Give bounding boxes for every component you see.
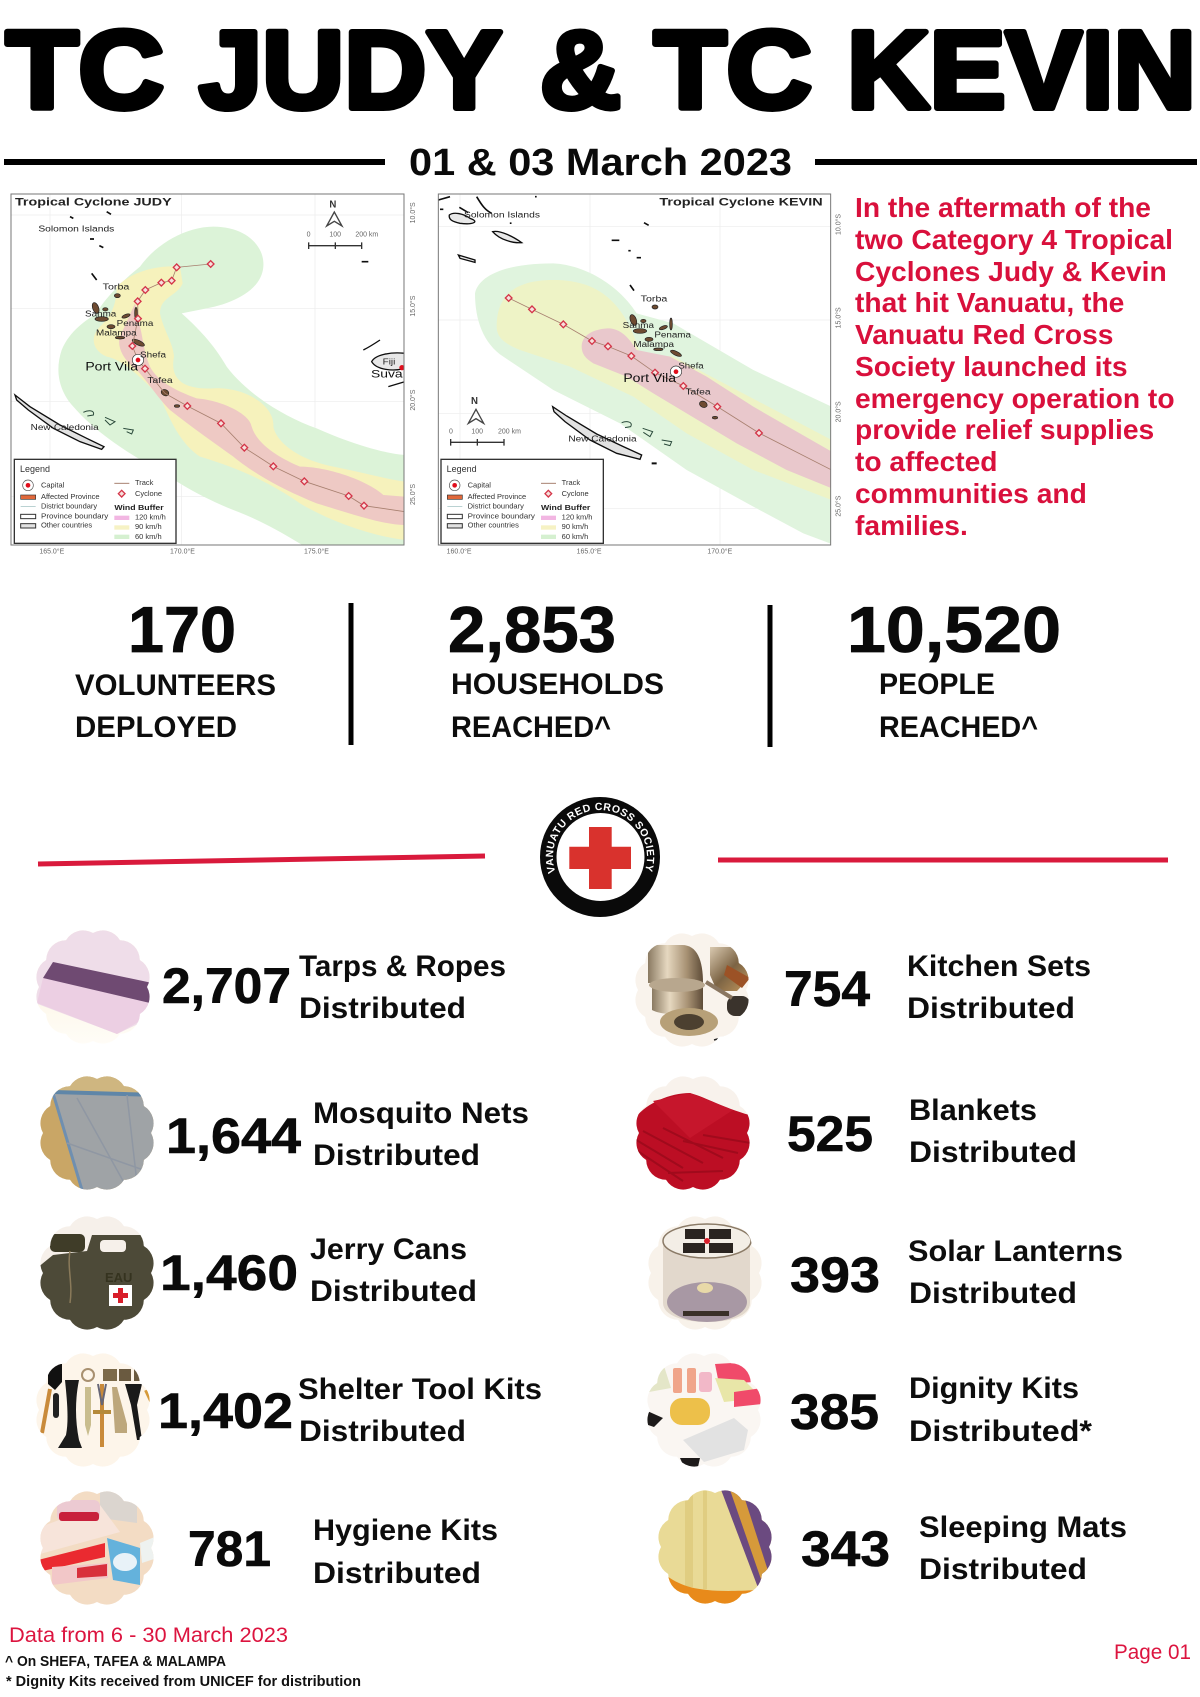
north arrow and scale bar: 100: [329, 232, 341, 239]
map: Tropical Cyclone Judy: 10.0°S: [409, 202, 417, 223]
item: kitchen sets: 754: [784, 961, 870, 1017]
data period note: Data from 6 - 30 March 2023: [9, 1624, 288, 1647]
stat: households: HOUSEHOLDS: [451, 668, 664, 701]
page number: Page 01: [1114, 1641, 1191, 1664]
item: sleeping mats: Sleeping Mats: [919, 1511, 1127, 1544]
legend: Track: [562, 478, 580, 487]
map: Tropical Cyclone Judy: 165.0°E: [39, 547, 65, 555]
track: [509, 298, 832, 470]
90 km/h wind buffer: [94, 266, 405, 540]
item: solar lanterns: Distributed: [909, 1277, 1077, 1310]
logo: Vanuatu Red Cross Society: VANUATU RED CROSS SOCIETY: [546, 802, 654, 874]
map: Tropical Cyclone Kevin: 10.0°S: [835, 214, 843, 235]
north arrow and scale bar: N: [329, 199, 336, 210]
legend: Capital: [41, 480, 65, 489]
map: Tropical Cyclone Kevin: Malampa: [633, 340, 675, 349]
map: Tropical Cyclone Kevin: 165.0°E: [577, 547, 602, 555]
60 km/h wind buffer: [58, 227, 405, 547]
photo: mosquito net: [37, 1073, 157, 1193]
intro paragraph: communities and: [855, 477, 1087, 509]
item: dignity kits: Dignity Kits: [909, 1372, 1079, 1405]
map: Tropical Cyclone Kevin: [438, 194, 843, 555]
map: Tropical Cyclone Judy: Fiji: [383, 358, 396, 367]
item: hygiene kits: Distributed: [313, 1557, 481, 1590]
map: Tropical Cyclone Judy: Tropical Cyclone JUDY: [15, 196, 172, 208]
map: Tropical Cyclone Kevin: Tropical Cyclone KEVIN: [659, 196, 823, 208]
legend: Capital: [468, 480, 491, 489]
item: kitchen sets: [632, 930, 1091, 1050]
item: jerry cans: Distributed: [310, 1275, 477, 1308]
legend: 60 km/h: [562, 532, 588, 541]
stat: volunteers: DEPLOYED: [75, 711, 237, 744]
stat: volunteers: VOLUNTEERS: [75, 669, 276, 702]
map: Tropical Cyclone Judy: Torba: [103, 283, 130, 292]
item: hygiene kits: [37, 1488, 498, 1608]
intro paragraph: In the aftermath of the: [855, 191, 1151, 223]
stat: volunteers: [75, 593, 276, 744]
photo: solar lantern: [648, 1216, 762, 1330]
item: sleeping mats: Distributed: [919, 1553, 1087, 1586]
item: sleeping mats: 343: [801, 1521, 890, 1577]
item: dignity kits: 385: [790, 1384, 879, 1440]
title: JUDY: [199, 9, 502, 132]
stat: volunteers: 170: [128, 593, 236, 666]
map: Tropical Cyclone Kevin: Port Vila: [623, 371, 676, 385]
item: blankets: 525: [787, 1106, 873, 1162]
stat: people: 10,520: [847, 593, 1061, 666]
legend: Cyclone: [562, 489, 589, 498]
map: Tropical Cyclone Judy: 175.0°E: [304, 547, 329, 555]
stat: people: PEOPLE: [879, 668, 995, 701]
map: Tropical Cyclone Judy: Malampa: [96, 329, 137, 338]
north arrow and scale bar: [449, 396, 521, 446]
stat: households: 2,853: [448, 593, 616, 666]
photo: jerry can: EAU: [105, 1270, 132, 1285]
map: Tropical Cyclone Kevin: Solomon Islands: [464, 211, 540, 220]
north arrow and scale bar: 200 km: [355, 232, 378, 239]
stat: people: [847, 593, 1061, 744]
legend: Province boundary: [468, 511, 535, 520]
item: kitchen sets: Kitchen Sets: [907, 950, 1091, 983]
120 km/h wind buffer: [119, 303, 405, 525]
islands: [15, 212, 405, 449]
legend: 90 km/h: [562, 522, 588, 531]
item: mosquito nets: 1,644: [166, 1108, 301, 1164]
photo: red blanket: [636, 1076, 750, 1190]
intro paragraph: [855, 191, 1175, 541]
120 km/h wind buffer: [582, 328, 832, 488]
intro paragraph: emergency operation to: [855, 382, 1175, 414]
title: [6, 9, 1196, 132]
map: Tropical Cyclone Judy: 20.0°S: [409, 389, 417, 411]
legend: District boundary: [468, 502, 524, 511]
legend: [14, 459, 176, 543]
photo: tarp: [36, 930, 150, 1042]
item: jerry cans: 1,460: [160, 1245, 298, 1301]
map: Tropical Cyclone Kevin: Penama: [654, 330, 692, 339]
item: blankets: Distributed: [909, 1136, 1077, 1169]
stat: people: REACHED^: [879, 711, 1038, 744]
intro paragraph: that hit Vanuatu, the: [855, 286, 1124, 318]
north arrow and scale bar: N: [471, 396, 478, 407]
item: mosquito nets: Distributed: [313, 1139, 480, 1172]
map: Tropical Cyclone Judy: Solomon Islands: [38, 225, 114, 234]
item: solar lanterns: Solar Lanterns: [908, 1235, 1123, 1268]
map: Tropical Cyclone Judy: Tafea: [147, 376, 173, 385]
north arrow and scale bar: [307, 199, 378, 249]
item: tarps and ropes: 2,707: [162, 958, 291, 1014]
title: &: [540, 9, 621, 132]
map: Tropical Cyclone Judy: 170.0°E: [170, 547, 195, 555]
legend: 60 km/h: [135, 532, 162, 541]
north arrow and scale bar: 0: [449, 428, 453, 435]
map: Tropical Cyclone Judy: 25.0°S: [409, 484, 417, 505]
legend: 120 km/h: [562, 512, 592, 521]
item: solar lanterns: 393: [790, 1247, 880, 1303]
item: shelter tool kits: Distributed: [299, 1415, 466, 1448]
legend: Affected Province: [41, 492, 100, 501]
legend: Legend: [20, 464, 50, 474]
map: Tropical Cyclone Judy: 15.0°S: [409, 295, 417, 317]
title: TC: [6, 9, 164, 132]
item: tarps and ropes: [33, 927, 506, 1047]
photo: dignity kit: [647, 1354, 761, 1467]
intro paragraph: provide relief supplies: [855, 413, 1154, 445]
date subtitle: 01 & 03 March 2023: [409, 142, 792, 184]
item: blankets: Blankets: [909, 1094, 1037, 1127]
map: Tropical Cyclone Judy: Port Vila: [85, 359, 138, 373]
map: Tropical Cyclone Kevin: 20.0°S: [835, 401, 843, 422]
legend: Province boundary: [41, 511, 109, 520]
photo: jerry can: [40, 1216, 154, 1330]
stat: households: REACHED^: [451, 711, 611, 744]
stat: households: [448, 593, 664, 744]
item: tarps and ropes: Tarps & Ropes: [299, 950, 506, 983]
legend: [441, 459, 603, 543]
title: TC: [654, 9, 812, 132]
photo: sleeping mat: [655, 1487, 775, 1607]
intro paragraph: families.: [855, 509, 968, 541]
photo: shelter tools: [36, 1354, 150, 1466]
map: Tropical Cyclone Judy: [11, 194, 417, 555]
north arrow and scale bar: 0: [307, 232, 311, 239]
legend: Other countries: [41, 521, 92, 530]
intro paragraph: to affected: [855, 445, 998, 477]
map: Tropical Cyclone Kevin: 15.0°S: [835, 307, 843, 328]
New Caledonia: [15, 395, 104, 449]
legend: Cyclone: [135, 489, 162, 498]
item: shelter tool kits: 1,402: [158, 1383, 293, 1439]
footnote: province coverage: ^ On SHEFA, TAFEA & MALAMPA: [5, 1654, 227, 1670]
logo: Vanuatu Red Cross Society: [540, 797, 660, 917]
item: kitchen sets: Distributed: [907, 992, 1075, 1025]
north arrow and scale bar: 200 km: [498, 428, 521, 435]
map: Tropical Cyclone Kevin: 160.0°E: [447, 547, 472, 555]
intro paragraph: Cyclones Judy & Kevin: [855, 255, 1167, 287]
map: Tropical Cyclone Kevin: Shefa: [678, 362, 704, 371]
item: mosquito nets: [37, 1073, 529, 1193]
legend: 90 km/h: [135, 522, 162, 531]
legend: Track: [135, 478, 154, 487]
north arrow and scale bar: 100: [471, 428, 483, 435]
legend: Wind Buffer: [114, 503, 164, 512]
item: jerry cans: [37, 1213, 477, 1333]
title: KEVIN: [847, 9, 1196, 132]
item: jerry cans: Jerry Cans: [310, 1233, 467, 1266]
islands: [438, 197, 718, 463]
map: Tropical Cyclone Judy: New-Caledonia: [31, 423, 99, 432]
map: Tropical Cyclone Judy: Suva: [371, 369, 404, 381]
map: Tropical Cyclone Kevin: New Caledonia: [568, 435, 637, 444]
intro paragraph: Vanuatu Red Cross: [855, 318, 1113, 350]
legend: Legend: [447, 464, 477, 474]
60 km/h wind buffer: [475, 263, 832, 544]
item: hygiene kits: Hygiene Kits: [313, 1514, 498, 1547]
legend: District boundary: [41, 502, 97, 511]
item: shelter tool kits: [33, 1350, 542, 1470]
intro paragraph: Society launched its: [855, 350, 1128, 382]
footnote: dignity kits: * Dignity Kits received from UNICEF for distribution: [6, 1674, 361, 1690]
90 km/h wind buffer: [497, 280, 832, 500]
map: Tropical Cyclone Kevin: Sanma: [623, 321, 655, 330]
map: Tropical Cyclone Kevin: 170.0°E: [707, 547, 733, 555]
photo: hygiene kit: [40, 1491, 154, 1605]
item: hygiene kits: 781: [188, 1521, 271, 1577]
New Caledonia: [553, 407, 642, 459]
intro paragraph: two Category 4 Tropical: [855, 223, 1173, 255]
item: shelter tool kits: Shelter Tool Kits: [298, 1373, 542, 1406]
item: dignity kits: Distributed*: [909, 1415, 1092, 1448]
legend: 120 km/h: [135, 512, 166, 521]
map: Tropical Cyclone Judy: Sanma: [85, 310, 117, 319]
photo: kitchen set: [636, 934, 749, 1046]
legend: Other countries: [468, 521, 519, 530]
map: Tropical Cyclone Kevin: 25.0°S: [835, 495, 843, 517]
Fiji: [363, 340, 405, 387]
track: [132, 264, 405, 512]
map: Tropical Cyclone Judy: Shefa: [140, 350, 167, 359]
item: mosquito nets: Mosquito Nets: [313, 1097, 529, 1130]
legend: Affected Province: [468, 492, 526, 501]
legend: Wind Buffer: [541, 503, 590, 512]
item: blankets: [633, 1073, 1077, 1193]
item: solar lanterns: [645, 1213, 1123, 1333]
map: Tropical Cyclone Kevin: Torba: [641, 294, 668, 303]
item: tarps and ropes: Distributed: [299, 992, 466, 1025]
item: sleeping mats: [655, 1487, 1127, 1607]
item: dignity kits: [644, 1350, 1092, 1470]
map: Tropical Cyclone Judy: Penama: [117, 319, 154, 328]
map: Tropical Cyclone Kevin: Tafea: [685, 388, 711, 397]
